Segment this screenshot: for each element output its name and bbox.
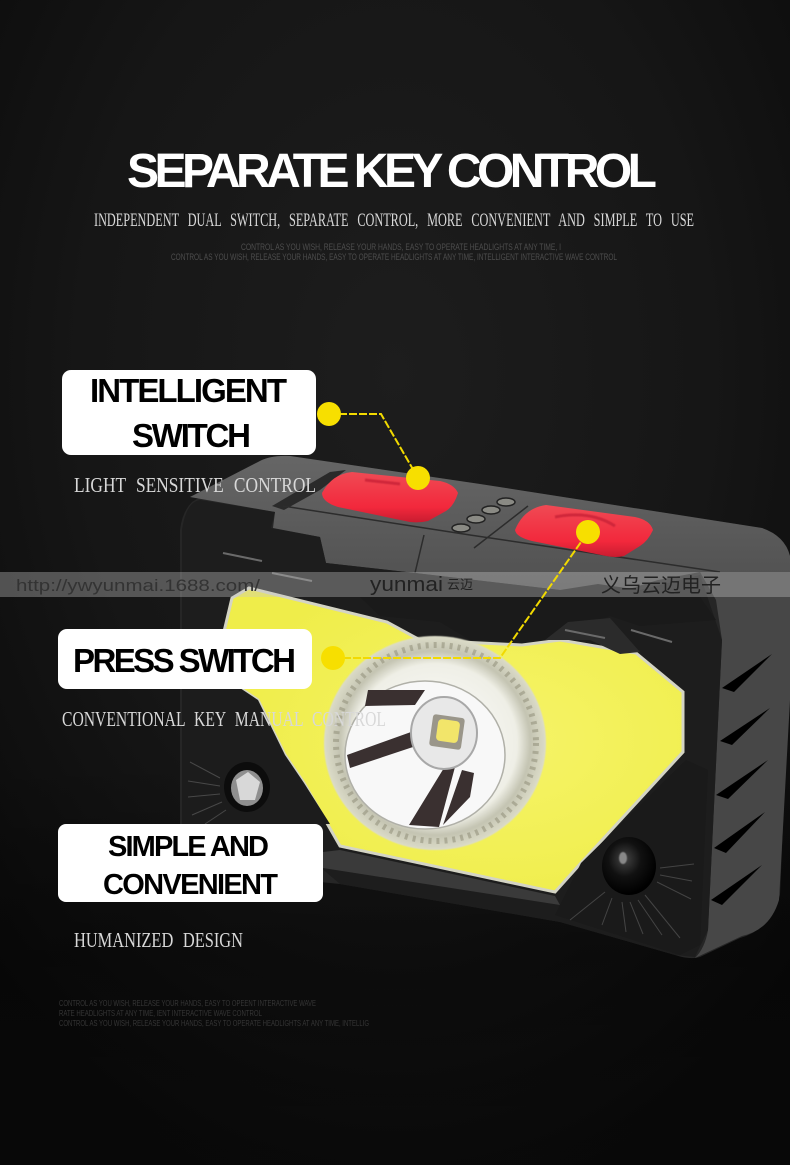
- small description text: [171, 242, 617, 262]
- label: intelligent switch: [62, 370, 316, 455]
- reflector: [345, 681, 505, 829]
- watermark logo chinese: 云迈: [447, 577, 473, 592]
- watermark company name: 义乌云迈电子: [601, 574, 721, 597]
- footer small text: RATE HEADLIGHTS AT ANY TIME, IENT INTERACTIVE WAVE CONTROL: [59, 1008, 262, 1018]
- lens knurling: [336, 645, 536, 841]
- watermark url: http://ywyunmai.1688.com/: [16, 576, 260, 595]
- yellow COB panel: [222, 588, 683, 892]
- label: simple and convenient: [58, 824, 323, 902]
- LED collar: [411, 697, 477, 769]
- label: simple and convenient: CONVENIENT: [103, 869, 278, 901]
- lower bezel lip: [323, 850, 560, 905]
- title: SEPARATE KEY CONTROL: [127, 145, 657, 198]
- caption: light sensitive control: LIGHT SENSITIVE CONTROL: [74, 473, 316, 497]
- sensor gem: [224, 762, 270, 812]
- caption: humanized design: HUMANIZED DESIGN: [74, 928, 243, 952]
- upper right clip: [545, 618, 640, 654]
- upper bezel over panel: [360, 597, 716, 640]
- dome rays: [570, 864, 694, 938]
- label: intelligent switch: INTELLIGENT: [90, 372, 287, 409]
- red button: sensor switch: [322, 472, 458, 522]
- label: press switch: PRESS SWITCH: [73, 642, 296, 679]
- front bezel: [182, 500, 722, 957]
- side fins: [711, 654, 772, 905]
- headlamp illustration: [180, 456, 790, 958]
- footer small text: [59, 998, 369, 1028]
- footer small text: CONTROL AS YOU WISH, RELEASE YOUR HANDS, EASY TO OPEENT INTERACTIVE WAVE: [59, 998, 316, 1008]
- button recess: [365, 480, 615, 526]
- front slots: [223, 553, 672, 642]
- lens outer ring: [324, 636, 546, 850]
- watermark band: [0, 572, 790, 597]
- reflector dark spokes: [347, 690, 474, 827]
- connector: intelligent switch: [317, 402, 430, 490]
- right side face: [695, 556, 790, 958]
- top trench behind button: [272, 470, 346, 510]
- red button: press switch: [515, 505, 653, 557]
- label: simple and convenient: SIMPLE AND: [108, 831, 269, 863]
- label: intelligent switch: SWITCH: [132, 417, 251, 454]
- connector: press switch: [321, 520, 600, 670]
- small description text: CONTROL AS YOU WISH, RELEASE YOUR HANDS, EASY TO OPERATE HEADLIGHTS AT ANY TIME, I: [241, 242, 561, 252]
- lamp body: [180, 456, 790, 958]
- top LED buttons: [452, 498, 515, 532]
- small description text: CONTROL AS YOU WISH, RELEASE YOUR HANDS, EASY TO OPERATE HEADLIGHTS AT ANY TIME, INTELLIGENT INTERACTIVE WAVE CONTROL: [171, 252, 617, 262]
- LED chip: [429, 714, 465, 750]
- infrared dome sensor: [602, 837, 656, 895]
- caption: conventional key manual control: CONVENTIONAL KEY MANUAL CONTROL: [62, 707, 386, 731]
- label: press switch: [58, 629, 312, 689]
- watermark logo: yunmai: [370, 574, 443, 596]
- right bezel corner: [555, 760, 708, 955]
- top face: [190, 456, 790, 598]
- footer small text: CONTROL AS YOU WISH, RELEASE YOUR HANDS, EASY TO OPERATE HEADLIGHTS AT ANY TIME, INTELLIG: [59, 1018, 369, 1028]
- gem rays: [188, 762, 226, 824]
- left bezel corner: [182, 680, 330, 824]
- top face seams: [283, 506, 720, 573]
